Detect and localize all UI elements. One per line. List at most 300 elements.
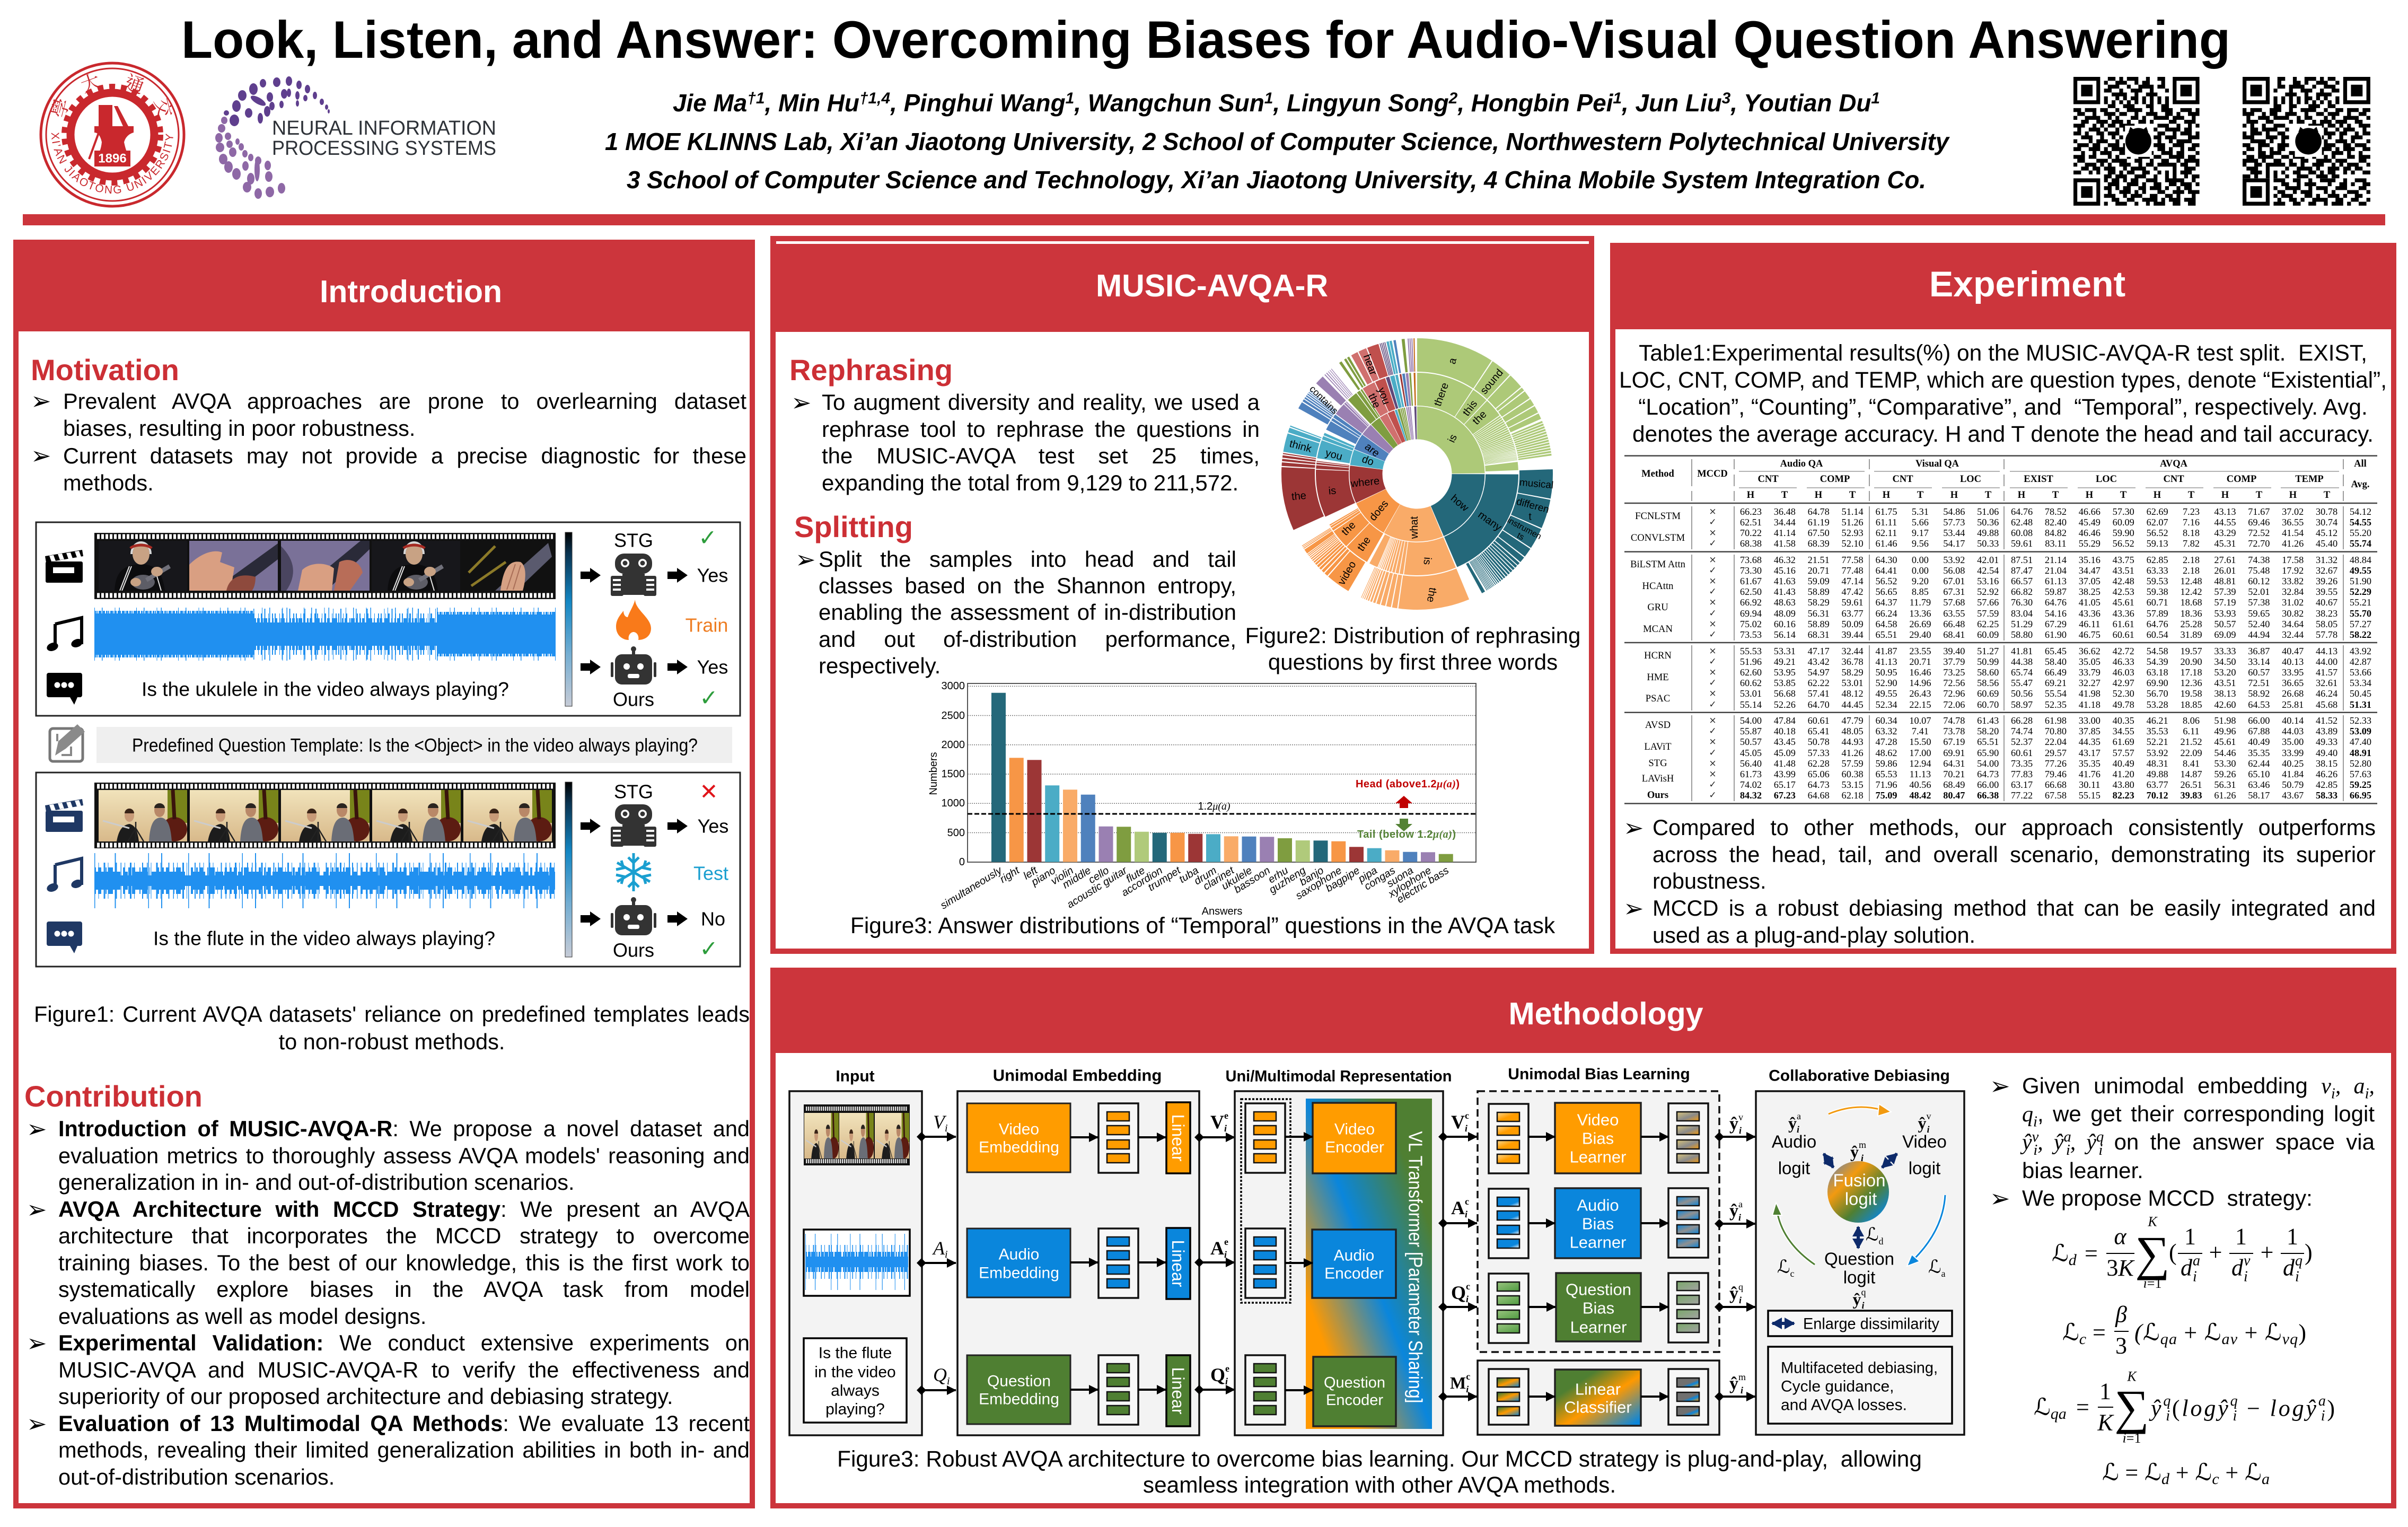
logo: Xi'an Jiaotong University seal: 1896 xyxy=(98,152,127,165)
formula: L_d: K xyxy=(2147,1214,2158,1229)
table: results: 40.35 xyxy=(2113,715,2134,725)
x axis labels: xylophone xyxy=(1386,865,1434,900)
authors and affiliations: †1,4 xyxy=(859,90,890,107)
arrow in xyxy=(581,568,601,583)
table: results: 55.53 xyxy=(1740,646,1762,656)
table: results: 44.00 xyxy=(2316,656,2337,667)
text: experiment bullets: robustness. xyxy=(1653,868,1767,893)
text: contribution bullets: Introduction of MUSIC-AVQA-R: We propose a novel dataset and xyxy=(58,1116,750,1141)
table: results: 26.01 xyxy=(2214,565,2236,576)
question encoder: Encoder xyxy=(1326,1392,1383,1409)
note: debiasing losses: Cycle guidance, xyxy=(1781,1377,1894,1396)
logo: Xi'an Jiaotong University seal: 大 xyxy=(76,66,104,98)
logo: Xi'an Jiaotong University seal: 通 xyxy=(121,67,148,99)
table: results: 35.00 xyxy=(2282,736,2304,747)
table: results: 29.40 xyxy=(1909,629,1931,640)
bias output arrows with labels: i xyxy=(1739,1125,1742,1136)
chart: sunburst of rephrased questions: is xyxy=(1328,485,1337,497)
bias arrows xyxy=(1528,1137,1668,1307)
representation output arrows with labels: i xyxy=(1466,1384,1469,1394)
text: MCCD bullets: Given unimodal embedding vi, ai, xyxy=(2022,1073,2375,1102)
table: results: ✓ xyxy=(1709,790,1717,801)
table: results: 57.57 xyxy=(2113,748,2134,758)
authors and affiliations: , Jun Liu xyxy=(1621,89,1722,117)
bias output arrows with labels: q xyxy=(1738,1282,1743,1292)
table: results: 72.56 xyxy=(1943,678,1965,688)
question embedding block xyxy=(967,1355,1070,1424)
table: results: 0.00 xyxy=(1912,555,1929,565)
table: results: 45.61 xyxy=(2113,597,2134,608)
panel: introduction: ➢ xyxy=(27,1409,47,1438)
table: results: 42.48 xyxy=(2113,576,2134,586)
authors and affiliations: , Lingyun Song xyxy=(1272,89,1449,117)
table: results: 52.92 xyxy=(1977,586,1999,597)
formula: L_d: 1 xyxy=(2235,1224,2247,1249)
table: results: 60.34 xyxy=(1875,715,1897,725)
table: results: 41.58 xyxy=(1774,538,1796,549)
table: results: 44.93 xyxy=(1842,736,1864,747)
x axis labels: accordion xyxy=(1120,865,1165,899)
text: MCCD bullets xyxy=(2022,1072,2375,1212)
text: contribution bullets: evaluation metrics to thoroughly assess AVQA models' reasoning and xyxy=(58,1143,750,1168)
table: results: 22.09 xyxy=(2180,748,2202,758)
icon: snowflake xyxy=(616,853,651,891)
panel: MUSIC-AVQA-R xyxy=(770,236,1594,954)
authors and affiliations: 3 School of Computer Science and Technology, Xi’an Jiaotong University, 4 China Mobile System Integration Co. xyxy=(627,166,1926,194)
column: uni/multimodal representation: Uni/Multimodal Representation xyxy=(1226,1068,1452,1085)
table: results: MCAN xyxy=(1643,624,1673,635)
table: results: 42.72 xyxy=(2113,646,2134,656)
answer: no: No xyxy=(701,908,725,930)
table: results: 69.90 xyxy=(2147,678,2168,688)
table: results: 48.91 xyxy=(2350,748,2371,758)
video encoder: Encoder xyxy=(1325,1139,1384,1156)
formula: L_qa: = xyxy=(2076,1394,2089,1420)
table: results: 22.15 xyxy=(1909,699,1931,709)
icon: fire xyxy=(616,600,651,640)
table: results: 66.24 xyxy=(1875,608,1897,618)
table: results: 73.78 xyxy=(1943,726,1965,736)
question bias learner xyxy=(1556,1273,1641,1341)
table: results: 43.51 xyxy=(2113,565,2134,576)
chart: sunburst of rephrased questions: does xyxy=(1367,498,1391,523)
table: results: 57.78 xyxy=(2316,629,2337,640)
table: results: 62.44 xyxy=(2248,758,2270,769)
check mark: ✓ xyxy=(699,685,718,710)
table: results: 50.56 xyxy=(2011,688,2033,699)
embedding output arrows with labels: V xyxy=(1210,1111,1224,1133)
caption: table 1: denotes the average accuracy. H and T denote the head and tail accuracy. xyxy=(1632,422,2374,447)
bias output arrows with labels: ŷ xyxy=(1729,1284,1738,1303)
panel: introduction: ➢ xyxy=(27,1195,47,1224)
formula: L_qa: i xyxy=(2166,1407,2170,1424)
table: results: ✓ xyxy=(1709,538,1717,549)
table: results: 43.17 xyxy=(2079,748,2101,758)
caption: table 1 xyxy=(1619,340,2387,448)
text: splitting xyxy=(819,546,1236,679)
text: rephrasing: expanding the total from 9,129 to 211,572. xyxy=(822,470,1238,495)
bias input stacks xyxy=(1489,1104,1528,1343)
table: results: ✓ xyxy=(1709,517,1717,528)
table: results: 55.21 xyxy=(2350,597,2371,608)
linear classifier group xyxy=(1478,1361,1719,1435)
table: results: 57.68 xyxy=(1943,597,1965,608)
table: results: 33.95 xyxy=(2282,667,2304,678)
table: results: 52.90 xyxy=(1875,678,1897,688)
table column headers: COMP xyxy=(2227,474,2256,485)
table: results: 60.38 xyxy=(1842,769,1864,779)
video encoder xyxy=(1313,1103,1396,1173)
table: results: 59.26 xyxy=(2214,769,2236,779)
table: results: 48.62 xyxy=(1875,748,1897,758)
table: results: 75.48 xyxy=(2248,565,2270,576)
formula: L_c: ℒ xyxy=(2062,1319,2079,1346)
table column headers: H xyxy=(1815,490,1823,501)
table: results: ✓ xyxy=(1709,656,1717,667)
table: results: 47.28 xyxy=(1875,736,1897,747)
table: results: 87.51 xyxy=(2011,555,2033,565)
table: results: 68.49 xyxy=(1943,779,1965,790)
authors and affiliations: 1 xyxy=(1264,90,1273,107)
table: results: 75.09 xyxy=(1875,790,1897,801)
table column headers: T xyxy=(2324,490,2331,501)
representation output arrows with labels: M xyxy=(1450,1373,1466,1392)
table: results: 57.33 xyxy=(1808,748,1830,758)
table: results: 52.34 xyxy=(1875,699,1897,709)
formula: total loss: a xyxy=(2262,1470,2270,1488)
table: results: 72.52 xyxy=(2248,528,2270,538)
icon: STG robot xyxy=(611,554,656,596)
icon: edit template xyxy=(50,724,85,761)
model label: STG: STG xyxy=(614,529,653,551)
authors and affiliations: 1 xyxy=(1613,90,1622,107)
table: results: 58.20 xyxy=(1977,726,1999,736)
table: results: 42.53 xyxy=(2113,586,2134,597)
table: results: 41.20 xyxy=(2113,769,2134,779)
table: results: 57.41 xyxy=(1808,688,1830,699)
y axis title: Numbers xyxy=(928,752,939,795)
bias output arrows with labels: a xyxy=(1738,1199,1743,1209)
representation output arrows with labels xyxy=(1443,1110,1477,1397)
table: results: 42.85 xyxy=(2316,779,2337,790)
table column headers: H xyxy=(2086,490,2094,501)
formula: L_c: c xyxy=(2079,1330,2086,1348)
arrow out xyxy=(667,568,688,583)
table: results: × xyxy=(1709,506,1717,517)
table: results: 53.44 xyxy=(1943,528,1965,538)
table: results: 61.46 xyxy=(1875,538,1897,549)
chart: sunburst of rephrased questions: the xyxy=(1425,586,1438,603)
table: results: 27.61 xyxy=(2214,555,2236,565)
table: results: 51.26 xyxy=(1842,517,1864,528)
table: results: 65.17 xyxy=(1774,779,1796,790)
table: results: 77.26 xyxy=(2045,758,2067,769)
table: results: 41.26 xyxy=(2282,538,2304,549)
bias output arrows with labels: i xyxy=(1741,1385,1743,1396)
table: results: 66.38 xyxy=(1977,790,1999,801)
question text: Is the flute in the video always playing? xyxy=(153,928,495,949)
formula: L_d: ℒ xyxy=(2052,1241,2069,1266)
table: results: 65.06 xyxy=(1808,769,1830,779)
table: results: 45.61 xyxy=(2214,736,2236,747)
table: results: 51.29 xyxy=(2011,618,2033,629)
text: motivation bullets: biases, resulting in poor robustness. xyxy=(63,416,415,441)
table: results: 51.96 xyxy=(1740,656,1762,667)
table: results: 25.28 xyxy=(2180,618,2202,629)
x axis labels: clarinet xyxy=(1201,864,1237,893)
loss labels: c xyxy=(1790,1268,1794,1279)
embedding output arrows with labels: e xyxy=(1225,1363,1229,1374)
table: results: 46.75 xyxy=(2079,629,2101,640)
table: results: 41.18 xyxy=(2079,699,2101,709)
logo: Xi'an Jiaotong University seal xyxy=(39,62,186,208)
input arrows with labels: Q xyxy=(933,1364,947,1385)
table: results: ✓ xyxy=(1709,726,1717,736)
table column headers: H xyxy=(1883,490,1891,501)
table: results: 34.47 xyxy=(2079,565,2101,576)
table: results: × xyxy=(1709,646,1717,656)
table: results: 59.61 xyxy=(1842,597,1864,608)
table: results: 42.87 xyxy=(2350,656,2371,667)
y axis labels: 2500 xyxy=(942,710,965,722)
table: results: 44.94 xyxy=(2248,629,2270,640)
formula: L_c: β xyxy=(2115,1301,2127,1328)
authors and affiliations xyxy=(605,89,1950,194)
table: results: 60.09 xyxy=(2113,517,2134,528)
table: results: 60.08 xyxy=(2011,528,2033,538)
table: results: 34.44 xyxy=(1774,517,1796,528)
table: results: 54.39 xyxy=(2147,656,2168,667)
table: results: × xyxy=(1709,667,1717,678)
table: results: 49.21 xyxy=(1774,656,1796,667)
table: results: 61.19 xyxy=(1808,517,1830,528)
table: results: 40.49 xyxy=(2248,736,2270,747)
table: results: 87.47 xyxy=(2011,565,2033,576)
table: results: 58.97 xyxy=(2011,699,2033,709)
table: results: 48.42 xyxy=(1909,790,1931,801)
x axis labels: simultaneously xyxy=(938,864,1005,911)
table column headers: T xyxy=(1781,490,1788,501)
embedding output arrows with labels: i xyxy=(1224,1249,1227,1260)
table: results: 48.63 xyxy=(1774,597,1796,608)
table: results: 53.95 xyxy=(1774,667,1796,678)
table: results: 57.73 xyxy=(1943,517,1965,528)
table: results: 62.28 xyxy=(1808,758,1830,769)
representation output arrows with labels: c xyxy=(1466,1281,1470,1292)
table: results: 46.66 xyxy=(2079,506,2101,517)
formula: L_d: i xyxy=(2295,1268,2299,1285)
table column headers: COMP xyxy=(1820,474,1850,485)
formula: L_d: i xyxy=(2193,1268,2197,1285)
table: results: CONVLSTM xyxy=(1631,532,1685,543)
table: results: × xyxy=(1709,555,1717,565)
bias output arrows with labels: v xyxy=(1738,1112,1743,1122)
table column headers: CNT xyxy=(1757,474,1779,485)
representation output arrows with labels: c xyxy=(1466,1371,1470,1382)
table column headers: H xyxy=(2018,490,2026,501)
table: results: 72.70 xyxy=(2248,538,2270,549)
table: results: 64.41 xyxy=(1875,565,1897,576)
x axis labels: tuba xyxy=(1177,865,1201,885)
methodology header band xyxy=(770,968,2396,1053)
x axis labels: trumpet xyxy=(1146,864,1183,893)
y axis labels: 3000 xyxy=(942,680,965,692)
table: results: 65.90 xyxy=(1977,748,1999,758)
table: results: 64.30 xyxy=(1875,555,1897,565)
formula: L_qa: i xyxy=(2321,1407,2325,1424)
embedding output arrows with labels: i xyxy=(1225,1376,1228,1386)
video embedding block: Embedding xyxy=(979,1139,1059,1156)
table: results: 43.13 xyxy=(2214,506,2236,517)
bias output stacks xyxy=(1668,1103,1708,1342)
table: results: HCAttn xyxy=(1642,581,1673,592)
table: results: AVSD xyxy=(1645,719,1671,731)
bias output arrows with labels: ŷ xyxy=(1729,1114,1738,1134)
table column headers: Avg. xyxy=(2351,479,2370,490)
table: results: 56.68 xyxy=(1774,688,1796,699)
table: results: 7.82 xyxy=(2183,538,2200,549)
x axis labels: right xyxy=(998,864,1022,885)
table: results: 26.69 xyxy=(1909,618,1931,629)
formula: L_d: 1 xyxy=(2287,1224,2298,1249)
table: results: ✓ xyxy=(1709,565,1717,576)
table: results: 62.22 xyxy=(1808,678,1830,688)
table: results: ✓ xyxy=(1709,748,1717,758)
formula: L_d: 1 xyxy=(2184,1224,2196,1249)
chart: sunburst of rephrased questions: many xyxy=(1476,509,1504,533)
table: results: 39.26 xyxy=(2316,576,2337,586)
film strip: ukulele video xyxy=(94,533,556,599)
text: rephrasing: To augment diversity and reality, we used a xyxy=(822,390,1260,415)
table: results: 16.46 xyxy=(1909,667,1931,678)
table: results: 51.31 xyxy=(2350,699,2371,709)
table: results: 50.09 xyxy=(1842,618,1864,629)
table: results: 52.10 xyxy=(1842,538,1864,549)
representation token stacks xyxy=(1245,1103,1285,1425)
table: results: 36.65 xyxy=(2282,678,2304,688)
table: results: 72.96 xyxy=(1943,688,1965,699)
table: results: 35.16 xyxy=(2079,555,2101,565)
table: results: 40.49 xyxy=(2113,758,2134,769)
table: results: 55.74 xyxy=(2350,538,2371,549)
video logit xyxy=(1902,1111,1947,1178)
formula: total loss: + xyxy=(2219,1459,2245,1486)
caption: figure 1 xyxy=(34,1001,750,1056)
table: results: HCRN xyxy=(1644,650,1672,661)
table: results: 62.18 xyxy=(1842,790,1864,801)
logo: NeurIPS xyxy=(215,76,496,199)
note: debiasing losses xyxy=(1768,1347,1952,1424)
table: results: 58.40 xyxy=(2045,656,2067,667)
table: results: 44.45 xyxy=(1842,699,1864,709)
table: results: 52.40 xyxy=(2248,618,2270,629)
table: results: 15.50 xyxy=(1909,736,1931,747)
formula: L_d: a xyxy=(2193,1252,2200,1269)
table: results: 51.14 xyxy=(1842,506,1864,517)
formula: L_qa: K xyxy=(2097,1409,2114,1436)
table: results: 32.84 xyxy=(2282,586,2304,597)
table: results: 64.70 xyxy=(1808,699,1830,709)
heading: MUSIC-AVQA-R: MUSIC-AVQA-R xyxy=(1096,268,1328,303)
panel: experiment: ➢ xyxy=(1623,813,1644,842)
table: results: 58.89 xyxy=(1808,586,1830,597)
table: results: 53.28 xyxy=(2147,699,2168,709)
question bias learner: Question xyxy=(1566,1280,1631,1299)
table: results: 60.16 xyxy=(1774,618,1796,629)
chart: sunburst of rephrased questions xyxy=(1288,353,1554,603)
table column headers: Method xyxy=(1641,469,1675,479)
dissimilarity arrows xyxy=(1824,1154,1897,1248)
heading: Introduction: Introduction xyxy=(320,274,502,309)
table column headers xyxy=(1641,459,2370,501)
table: results: 83.11 xyxy=(2045,538,2067,549)
table: results: 29.57 xyxy=(2045,748,2067,758)
authors and affiliations: 2 xyxy=(1448,90,1458,107)
QR code: right xyxy=(2243,77,2370,206)
input video film strip xyxy=(804,1104,910,1165)
table: results: 30.82 xyxy=(2282,608,2304,618)
input audio waveform xyxy=(804,1230,910,1296)
chart: answer distribution bars xyxy=(928,680,1476,917)
table: results: 57.89 xyxy=(2147,608,2168,618)
formula: L_c: = xyxy=(2093,1319,2106,1346)
table: results: × xyxy=(1709,528,1717,538)
table: results: 12.36 xyxy=(2180,678,2202,688)
text: motivation bullets: Prevalent AVQA approaches are prone to overlearning dataset xyxy=(63,389,746,414)
table: results: 46.46 xyxy=(2079,528,2101,538)
table column headers: T xyxy=(1985,490,1992,501)
table: results: 55.29 xyxy=(2079,538,2101,549)
loss labels: d xyxy=(1879,1236,1883,1247)
text: experiment bullets: MCCD is a robust debiasing method that can be easily integrated and xyxy=(1653,896,2376,920)
x axis labels: acoustic guitar xyxy=(1065,864,1130,911)
table: results: 39.40 xyxy=(1943,646,1965,656)
authors and affiliations: 3 xyxy=(1722,90,1731,107)
formula: L_d xyxy=(2052,1214,2313,1291)
text: MCCD bullets: ŷvi, ŷai, ŷqi on the answer space via xyxy=(2022,1129,2375,1159)
table: results: 73.53 xyxy=(1740,629,1762,640)
formula: total loss: d xyxy=(2161,1470,2170,1488)
tail arrow xyxy=(1395,819,1412,831)
formula: L_d: ) xyxy=(2305,1240,2313,1265)
panel: introduction xyxy=(13,240,755,1508)
table: results: 17.18 xyxy=(2180,667,2202,678)
table: results: 55.47 xyxy=(2011,678,2033,688)
table: results: 31.32 xyxy=(2316,555,2337,565)
table: results: ✓ xyxy=(1709,779,1717,790)
table: results: 62.51 xyxy=(1740,517,1762,528)
encoder arrows xyxy=(1285,1137,1313,1390)
table: results: 35.35 xyxy=(2248,748,2270,758)
table: results: 53.31 xyxy=(1774,646,1796,656)
embedding output arrows with labels: e xyxy=(1224,1236,1228,1247)
table: results: 41.54 xyxy=(2282,528,2304,538)
table: results: 43.42 xyxy=(1808,656,1830,667)
embedding output arrows with labels: i xyxy=(1224,1123,1227,1134)
table: results: 62.50 xyxy=(1740,586,1762,597)
table: results: 48.84 xyxy=(2350,555,2371,565)
table: results: 18.36 xyxy=(2180,608,2202,618)
table: results: 9.20 xyxy=(1912,576,1929,586)
table: results: 42.54 xyxy=(1977,565,1999,576)
table: results: 43.75 xyxy=(2113,555,2134,565)
loss labels: a xyxy=(1941,1268,1946,1279)
question bias learner: Bias xyxy=(1583,1299,1614,1317)
table: results: 43.80 xyxy=(2113,779,2134,790)
formula: L_d: ( xyxy=(2169,1240,2177,1265)
caption: figure 3 architecture: seamless integration with other AVQA methods. xyxy=(1143,1472,1616,1497)
table column headers: T xyxy=(1917,490,1924,501)
